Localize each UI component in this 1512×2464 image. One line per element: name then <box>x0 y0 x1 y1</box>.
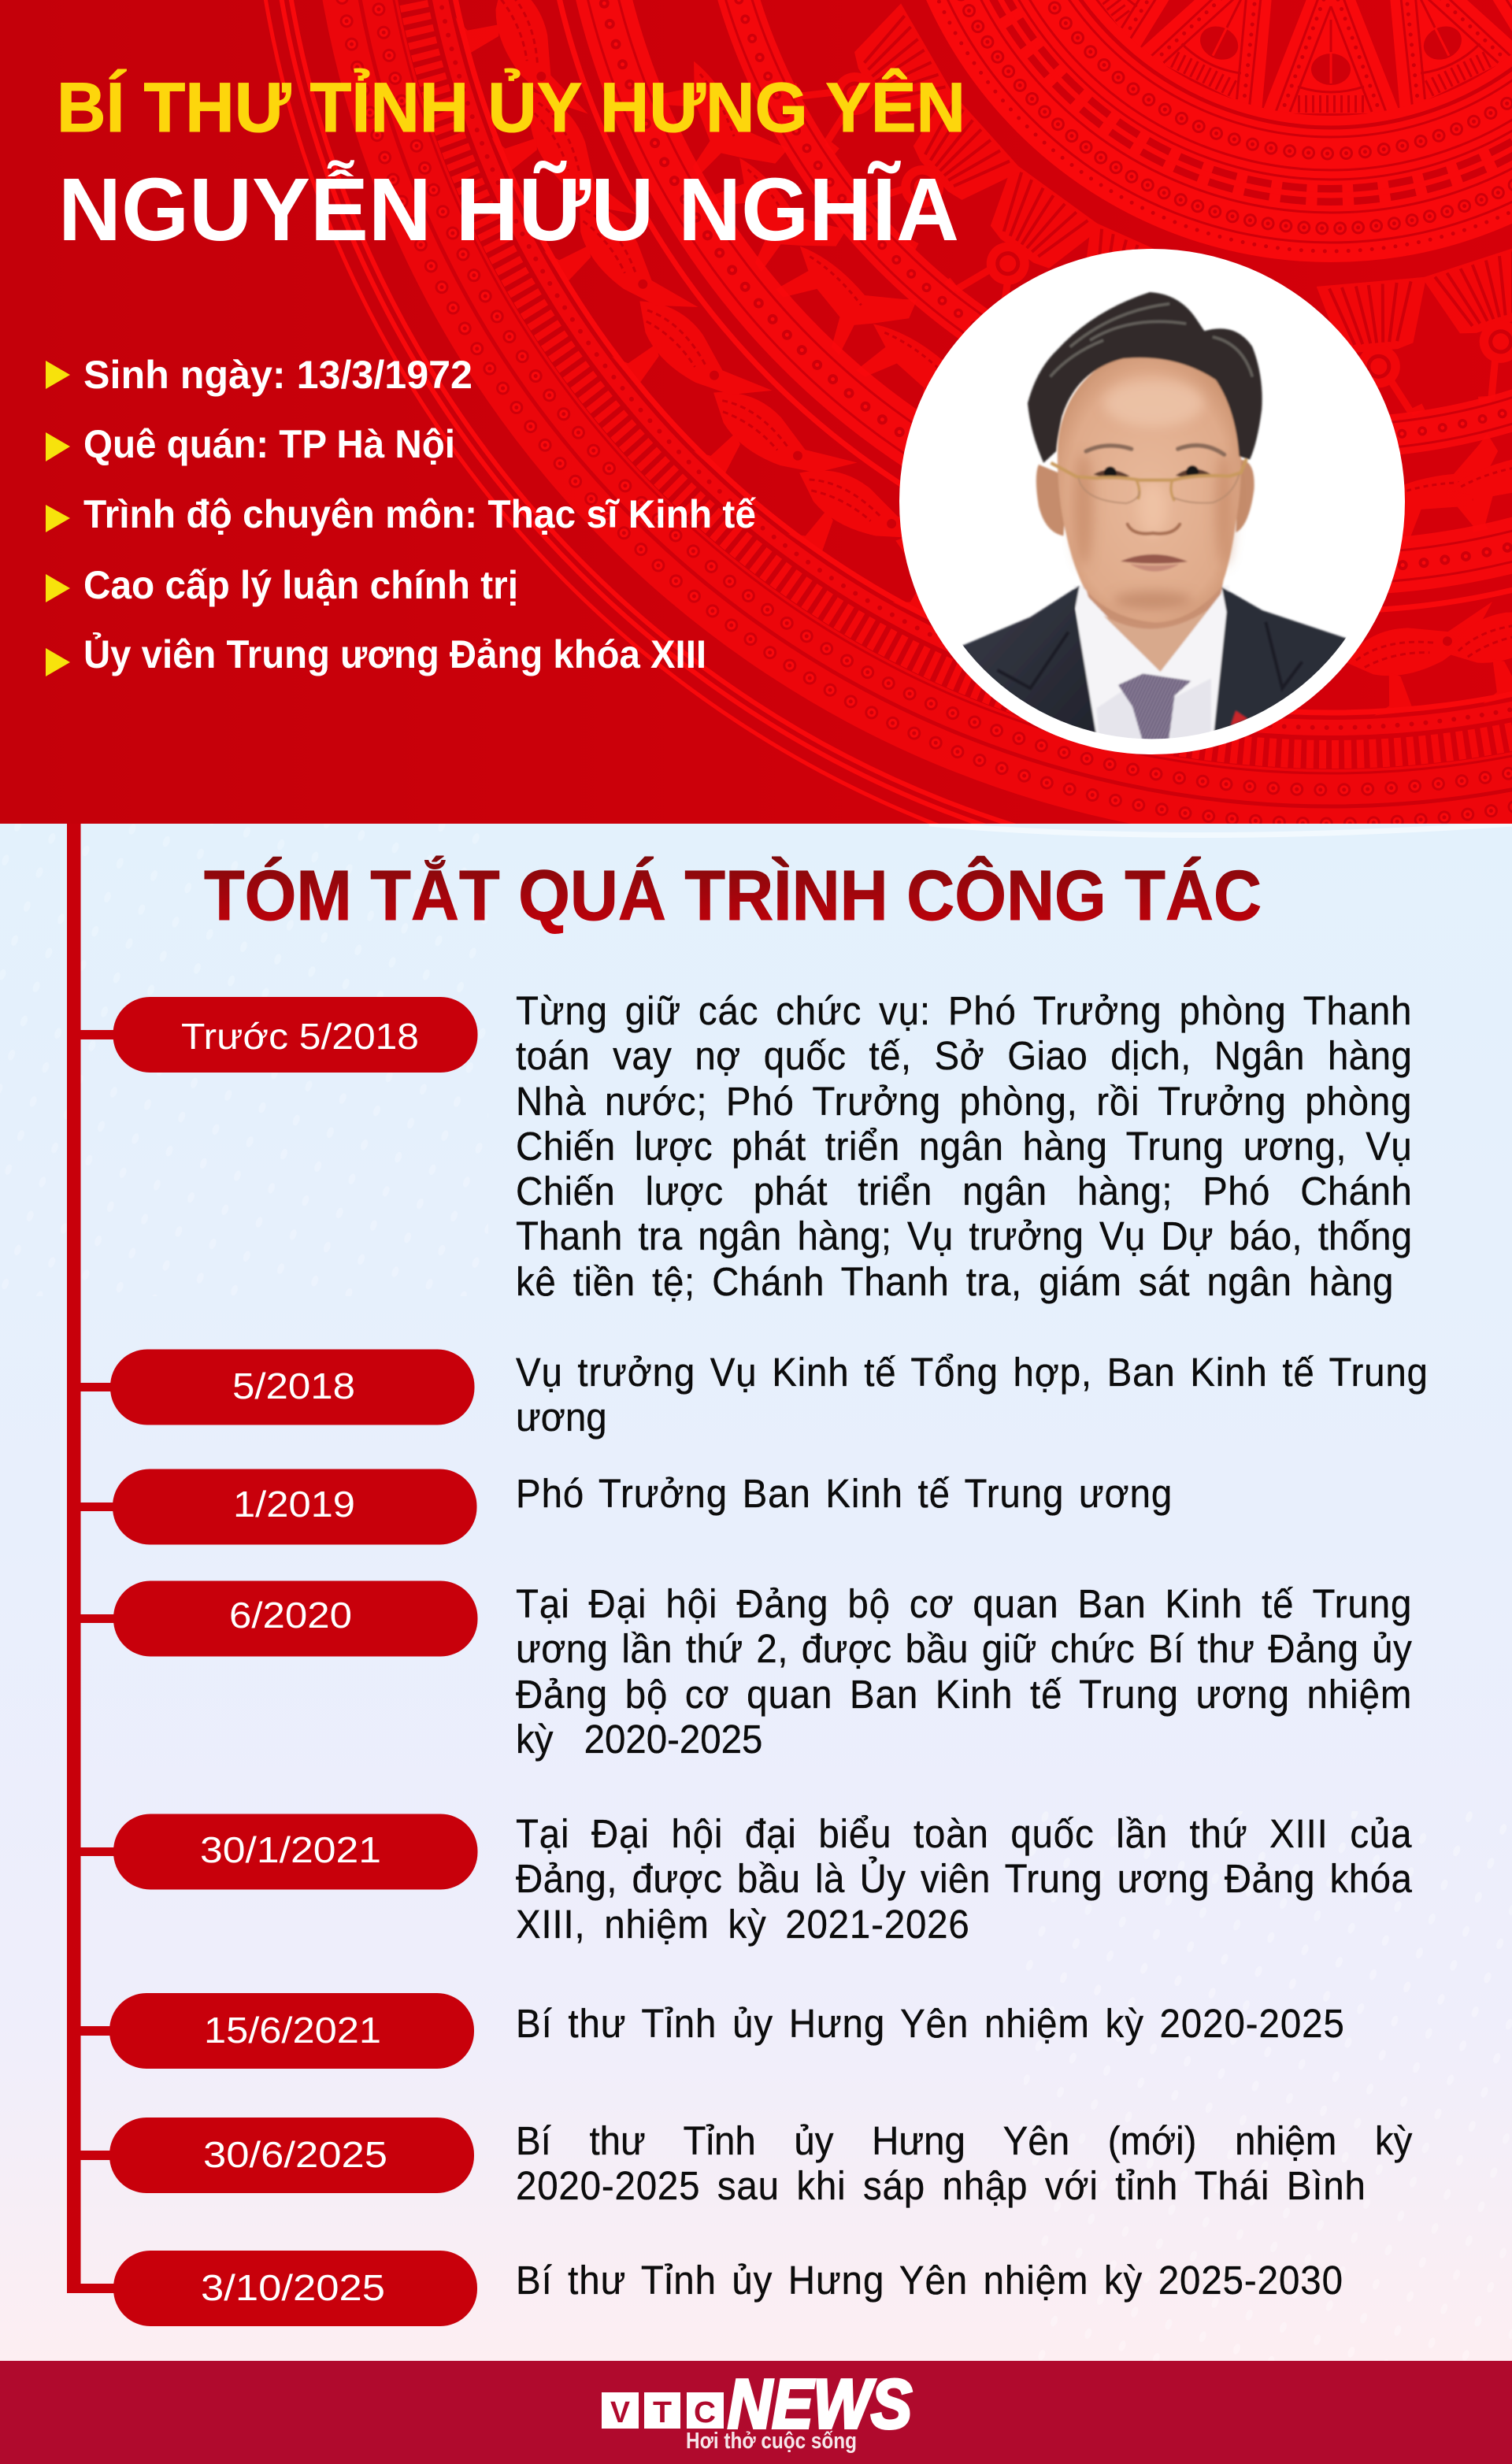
lower section background <box>0 824 1512 2361</box>
footer band <box>0 2361 1512 2464</box>
career text: 30/6/2025: 2020-2025 sau khi sáp nhập với tỉnh Thái Bình <box>516 2163 1366 2208</box>
mouth <box>1121 554 1188 564</box>
career text: 5/2018: Vụ trưởng Vụ Kinh tế Tổng hợp, Ban Kinh tế Trung <box>516 1350 1429 1395</box>
career text: 1/2019: Phó Trưởng Ban Kinh tế Trung ương <box>516 1471 1173 1516</box>
career text: before 5/2018: Thanh tra ngân hàng; Vụ trưởng Vụ Dự báo, thống <box>516 1213 1412 1258</box>
flag pin <box>1231 711 1247 725</box>
VTC News logo: C <box>694 2396 716 2429</box>
hair <box>1028 292 1262 463</box>
bullet: political theory: Cao cấp lý luận chính trị <box>83 563 518 607</box>
date pill: 1/2019 <box>113 1469 477 1545</box>
outer rings <box>250 0 1512 899</box>
career text: 6/2020: Đảng bộ cơ quan Ban Kinh tế Trung ương nhiệm <box>516 1672 1412 1717</box>
career text: 15/6/2021: Bí thư Tỉnh ủy Hưng Yên nhiệm kỳ 2020-2025 <box>516 2001 1345 2046</box>
date pill: 5/2018: 5/2018 <box>232 1365 355 1406</box>
career text: 30/6/2025: Bí thư Tỉnh ủy Hưng Yên (mới) nhiệm kỳ <box>516 2118 1412 2163</box>
suit <box>962 584 1097 732</box>
career text: before 5/2018: Từng giữ các chức vụ: Phó Trưởng phòng Thanh <box>516 988 1412 1033</box>
career text: 30/1/2021 <box>516 1811 1413 1947</box>
career text: 30/6/2025 <box>516 2118 1413 2208</box>
career text: 3/10/2025: Bí thư Tỉnh ủy Hưng Yên nhiệm kỳ 2025-2030 <box>516 2258 1343 2303</box>
ears <box>1036 465 1067 535</box>
section heading: TÓM TẮT QUÁ TRÌNH CÔNG TÁC <box>204 855 1262 936</box>
glasses <box>1051 459 1247 503</box>
date pill: Trước 5/2018: Trước 5/2018 <box>181 1016 419 1057</box>
face shading <box>1073 380 1233 610</box>
VTC News logo <box>602 2365 912 2454</box>
eyes <box>1093 469 1211 478</box>
inner drum star <box>1054 0 1512 113</box>
career text: before 5/2018: Nhà nước; Phó Trưởng phòng, rồi Trưởng phòng <box>516 1079 1412 1124</box>
date pill: 30/1/2021: 30/1/2021 <box>200 1829 381 1870</box>
date pill: 6/2020 <box>113 1581 477 1657</box>
date pill: 3/10/2025 <box>113 2251 477 2326</box>
portrait photo in white circle <box>899 249 1405 754</box>
date pill: 3/10/2025: 3/10/2025 <box>201 2267 385 2308</box>
VTC News logo: Hơi thở cuộc sống <box>686 2429 857 2454</box>
career text: 5/2018 <box>516 1350 1429 1439</box>
career text: 6/2020: ương lần thứ 2, được bầu giữ chức Bí thư Đảng ủy <box>516 1626 1412 1671</box>
header banner with bronze drum pattern <box>0 0 1512 899</box>
title line 2: name: NGUYỄN HỮU NGHĨA <box>58 160 959 259</box>
bullet: education: Trình độ chuyên môn: Thạc sĩ Kinh tế <box>83 492 756 536</box>
career text: 30/1/2021: Đảng, được bầu là Ủy viên Trung ương Đảng khóa <box>516 1856 1412 1901</box>
neck <box>1086 581 1224 630</box>
profile bullet list <box>46 353 756 676</box>
date pill: 1/2019: 1/2019 <box>233 1484 355 1525</box>
date pill: Trước 5/2018 <box>113 997 477 1073</box>
inner drum rings <box>899 0 1512 251</box>
bullet: central committee: Ủy viên Trung ương Đảng khóa XIII <box>83 632 706 676</box>
shirt <box>1073 586 1232 748</box>
VTC News logo: V <box>610 2396 631 2429</box>
timeline spine and connectors <box>67 824 117 2293</box>
career text: before 5/2018: toán vay nợ quốc tế, Sở Giao dịch, Ngân hàng <box>516 1033 1412 1078</box>
career text: before 5/2018: Chiến lược phát triển ngân hàng Trung ương, Vụ <box>516 1124 1412 1169</box>
face <box>1058 357 1241 623</box>
eyebrows <box>1086 446 1132 451</box>
career text: 30/1/2021: Tại Đại hội đại biểu toàn quốc lần thứ XIII của <box>516 1811 1412 1856</box>
career text: 6/2020: Tại Đại hội Đảng bộ cơ quan Ban Kinh tế Trung <box>516 1581 1412 1626</box>
date pill: 5/2018 <box>110 1350 474 1425</box>
date pill: 15/6/2021 <box>109 1993 474 2069</box>
bullet: home town: Quê quán: TP Hà Nội <box>83 422 455 466</box>
career text: 6/2020 <box>516 1581 1412 1762</box>
date pill: 30/6/2025 <box>109 2118 474 2193</box>
nose <box>1128 524 1180 534</box>
date pill: 30/1/2021 <box>113 1814 477 1890</box>
career text: before 5/2018: Chiến lược phát triển ngân hàng; Phó Chánh <box>516 1169 1412 1213</box>
career text: 6/2020: kỳ 2020-2025 <box>516 1717 762 1762</box>
VTC News logo: T <box>653 2396 672 2429</box>
date pill: 30/6/2025: 30/6/2025 <box>203 2134 387 2175</box>
career text: before 5/2018: kê tiền tệ; Chánh Thanh tra, giám sát ngân hàng <box>516 1259 1394 1304</box>
middle rings <box>539 0 1512 611</box>
bullet: birth date: Sinh ngày: 13/3/1972 <box>83 353 472 397</box>
title line 1: BÍ THƯ TỈNH ỦY HƯNG YÊN <box>57 68 965 146</box>
career text: before 5/2018 <box>516 988 1412 1304</box>
career text: 30/1/2021: XIII, nhiệm kỳ 2021-2026 <box>516 1902 970 1947</box>
tie <box>1118 673 1191 745</box>
VTC News logo: NEWS <box>728 2365 912 2443</box>
career text: 5/2018: ương <box>516 1395 607 1439</box>
date pill: 6/2020: 6/2020 <box>229 1595 352 1636</box>
date pill: 15/6/2021: 15/6/2021 <box>204 2010 381 2051</box>
animal and bird motifs <box>449 0 1512 718</box>
